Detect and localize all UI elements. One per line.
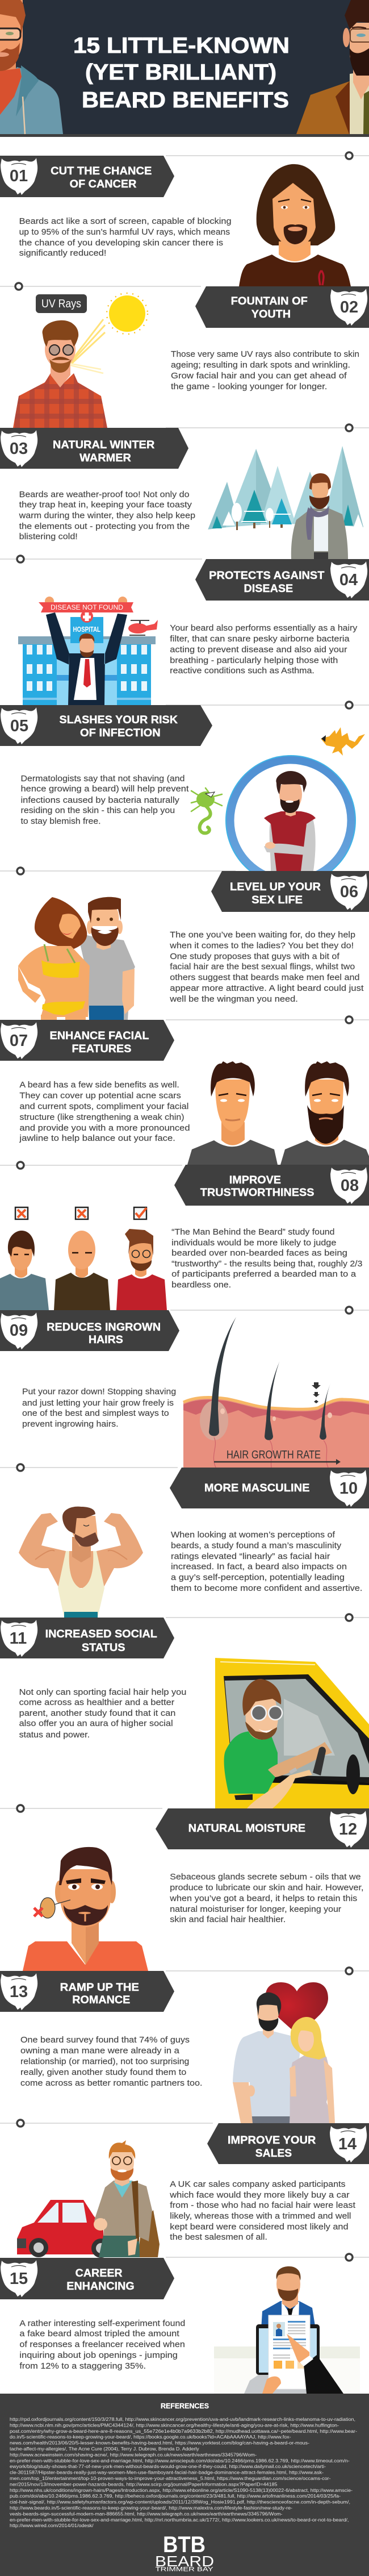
- text: benefit 03: warm during the winter, they also help keep: [19, 511, 195, 520]
- text: benefit 14: which face would they more likely buy a car: [169, 2190, 350, 2200]
- references list: do.in/5-scientific-reasons-to-keep-growing-your-beard/, https://books.google.co.uk/books?id=ACAbAAAAYAAJ, http://www.fox-: [10, 2434, 291, 2440]
- text: benefit 05: Dermatologists say that not shaving (and: [20, 774, 185, 783]
- references list: pub.com/doi/abs/10.2466/pms.1986.62.3.769, http://beheco.oxfordjournals.org/content/23/3/481.full, http://www.artofmanliness.com/2014/03/25/fa-: [10, 2493, 341, 2499]
- banner 04: protects against disease: PROTECTS AGAINST: [209, 569, 324, 582]
- text: benefit 08: “The Man Behind the Beard” study found: [171, 1227, 335, 1237]
- badge 04: [330, 561, 367, 598]
- icon: orange bacteria: [321, 727, 365, 756]
- text: benefit 01: Beards act like a sort of screen, capable of blocking: [19, 216, 232, 226]
- text: benefit 05: [20, 774, 189, 826]
- banner 12: natural moisture: NATURAL MOISTURE: [188, 1822, 305, 1835]
- badge 02: 02: [340, 298, 358, 316]
- text: benefit 07: [19, 1080, 190, 1143]
- text: benefit 10: increased. In fact, a beard also impacts on: [171, 1562, 347, 1572]
- badge 10: 10: [339, 1479, 358, 1498]
- header band: [0, 0, 369, 137]
- badge 02: [330, 289, 367, 326]
- badge 15: 15: [10, 2270, 28, 2288]
- text: benefit 09: [22, 1387, 176, 1429]
- text: benefit 10: beards, a study found a man’s masculinity: [171, 1541, 342, 1550]
- illustration: man with moustache and skin close-up: [23, 1847, 148, 1971]
- text: benefit 02: the game - looking younger for longer.: [171, 382, 327, 391]
- text: benefit 08: individuals would be more likely to judge: [171, 1238, 336, 1248]
- text: benefit 13: [20, 2035, 202, 2088]
- icon: cross checkbox 1: [15, 1207, 28, 1219]
- text: benefit 08: beardless one.: [171, 1280, 231, 1290]
- text: benefit 12: Sebaceous glands secrete sebum - oils that we: [170, 1872, 361, 1882]
- banner 07: enhance facial features: ENHANCE FACIAL: [50, 1029, 149, 1042]
- banner 08: improve trustworthiness: [174, 1165, 369, 1206]
- text: benefit 13: come across as better romantic partners too.: [20, 2078, 202, 2088]
- banner 10: more masculine: MORE MASCULINE: [204, 1482, 310, 1494]
- label: UV Rays: [36, 294, 87, 313]
- text: benefit 05: to stay blemish free.: [20, 816, 101, 826]
- banner: DISEASE NOT FOUND: [39, 597, 133, 612]
- text: benefit 08: [171, 1227, 362, 1290]
- illustration: ring and man with crossed arms: [226, 756, 355, 885]
- references list: http://www.ncbi.nlm.nih.gov/pmc/articles/PMC4344124/, http://www.skincancer.org/healthy-lifestyle/anti-aging/you-are-at-risk, http://www.huffington-: [10, 2422, 339, 2428]
- references list: en-prefer-men-with-stubble-for-love-sex-and-marriage.html, http://www.amsciepub.com/doi/abs/10.2466/pms.1986.62.3.769, http://www.timeout.com/n-: [10, 2458, 350, 2464]
- text: benefit 08: of participants preferred a bearded man to a: [171, 1269, 357, 1279]
- text: benefit 10: When looking at women’s perceptions of: [171, 1530, 336, 1540]
- references list: ner/2015/nov/13/movember-power-hazards-beards, http://www.scirp.org/journal/PaperInformation.aspx?PaperID=44185: [10, 2481, 278, 2487]
- text: benefit 15: from 12% to a staggering 35%.: [19, 2361, 146, 2371]
- text: benefit 08: “trustworthy” - the results being that, roughly 2/3: [171, 1259, 362, 1269]
- banner 03: natural winter warmer: NATURAL WINTER: [53, 439, 154, 451]
- banner 06: level up your sex life: LEVEL UP YOUR: [230, 881, 321, 893]
- references list: http://www.wired.com/2014/01/odesk/: [10, 2523, 94, 2528]
- badge 09: 09: [10, 1322, 28, 1340]
- text: benefit 06: The one you’ve been waiting for, do they help: [170, 930, 355, 940]
- illustration: muscle man: [19, 1507, 143, 1618]
- text: benefit 15: a fake beard almost tripled the amount: [19, 2329, 180, 2339]
- text: benefit 04: [170, 623, 358, 676]
- banner 14: improve your sales: IMPROVE YOUR: [228, 2134, 316, 2146]
- title: 15 LITTLE-KNOWN: [73, 34, 290, 58]
- banner 01: cut the chance of cancer: OF CANCER: [70, 178, 136, 190]
- badge 12: 12: [339, 1820, 357, 1839]
- banner 05: slashes your risk of infection: OF INFECTION: [80, 727, 161, 739]
- references list: http://www.nhs.uk/conditions/ingrown-hairs/Pages/Introduction.aspx, http://www.ehbonline.org/article/S1090-5138(13)00022-6/abstract, http://www.amscie-: [10, 2487, 353, 2493]
- references list: cial-hair-signal/, http://www.safetyhumanfactors.org/wp-content/uploads/2011/12/38Wog_Hosie1991.pdf, http://thescienceofacne.com/in-depth-sebum/,: [10, 2499, 350, 2505]
- banner 14: improve your sales: [207, 2123, 369, 2164]
- title: (YET BRILLIANT): [85, 60, 276, 85]
- references list: [10, 2416, 357, 2528]
- illustration: couple: [18, 897, 135, 1020]
- banner 11: increased social status: [0, 1618, 174, 1658]
- banner 02: fountain of youth: YOUTH: [251, 308, 291, 320]
- text: benefit 02: ageing; resulting in dark spots and wrinkling.: [171, 360, 350, 370]
- badge 08: [330, 1167, 367, 1204]
- badge 06: [330, 873, 367, 910]
- badge 01: 01: [10, 167, 28, 185]
- text: benefit 15: [19, 2319, 185, 2371]
- badge 06: 06: [340, 883, 358, 901]
- text: benefit 04: breathing - particularly helping those with: [170, 656, 338, 665]
- references list: http://www.acneeinstein.com/shaving-acne/, http://www.telegraph.co.uk/news/earth/earthnews/3345796/Wom-: [10, 2452, 257, 2457]
- banner 07: enhance facial features: [0, 1020, 174, 1061]
- text: benefit 13: owning a man mane were already in a: [20, 2046, 180, 2056]
- text: benefit 05: hence growing a beard) will help prevent: [20, 784, 189, 794]
- badge 14: 14: [338, 2135, 357, 2153]
- text: benefit 11: Not only can sporting facial hair help you: [19, 1687, 186, 1697]
- icon: cross checkbox 2: [76, 1207, 88, 1219]
- banner 13: ramp up the romance: ROMANCE: [72, 1994, 130, 2006]
- badge 13: [1, 1973, 37, 2010]
- banner 02: fountain of youth: FOUNTAIN OF: [231, 295, 308, 307]
- icon: green bacteria: [191, 788, 222, 833]
- text: benefit 13: relationship (or married), not too surprising: [20, 2057, 189, 2066]
- banner 04: protects against disease: [195, 559, 369, 601]
- references list: en-prefer-men-with-stubble-for-love-sex-and-marriage.html, http://nrl.northumbria.ac.uk/1772/, http://www.lookers.co.uk/news/to-beard-or-not-to-beard/,: [10, 2517, 349, 2523]
- text: benefit 07: A beard has a few side benefits as well.: [19, 1080, 179, 1090]
- text: benefit 11: come across as healthier and a better: [19, 1698, 174, 1707]
- text: benefit 06: well be the wingman you need.: [169, 994, 298, 1004]
- badge 03: 03: [10, 440, 28, 458]
- text: benefit 14: likely, whereas those with a trimmed and well: [170, 2211, 351, 2221]
- text: benefit 01: the chance of you developing skin cancer there is: [19, 238, 223, 248]
- badge 05: [1, 707, 37, 744]
- text: benefit 14: the best salesmen of all.: [170, 2232, 267, 2242]
- text: benefit 15: A rather interesting self-experiment found: [19, 2319, 185, 2328]
- illustration: couple with heart: [233, 1982, 335, 2123]
- references list: tache-affect-my-allergies/, The Acne Cure (2004), Terry J. Dubrow, Brenda D. Adderly: [10, 2446, 199, 2452]
- text: benefit 04: reactive conditions such as Asthma.: [170, 666, 315, 676]
- references list: veals-beards-sign-successful-modern-man-886655.html, http://www.telegraph.co.uk/news/earth/earthnews/3345796/Wom-: [10, 2511, 283, 2516]
- text: benefit 14: from - those who had no facial hair were least: [170, 2200, 356, 2210]
- text: benefit 06: when it comes to the ladies? You bet they do!: [169, 941, 354, 951]
- text: benefit 04: acting to prevent disease and also aid your: [170, 645, 347, 655]
- illustration: clean-shaven and bearded men: [187, 1061, 369, 1165]
- text: benefit 15: inquiring about job openings - jumping: [19, 2350, 178, 2360]
- text: benefit 11: also offer you an aura of higher social: [19, 1719, 173, 1728]
- text: benefit 04: Your beard also performs essentially as a hairy: [170, 623, 358, 633]
- banner 11: increased social status: STATUS: [82, 1641, 125, 1654]
- banner 15: career enhancing: [0, 2258, 174, 2299]
- text: benefit 03: [19, 490, 195, 541]
- banner 08: improve trustworthiness: IMPROVE: [229, 1174, 281, 1186]
- text: benefit 03: Beards are weather-proof too! Not only do: [19, 490, 190, 499]
- logo: Beard Trimmer Bay: TRIMMER BAY: [156, 2566, 213, 2573]
- badge 01: [1, 158, 37, 195]
- text: benefit 09: one of the best and simplest ways to: [22, 1408, 169, 1418]
- banner 04: protects against disease: DISEASE: [244, 582, 293, 595]
- text: benefit 14: A UK car sales company asked participants: [170, 2179, 346, 2189]
- text: benefit 06: [169, 930, 364, 1004]
- banner 11: increased social status: INCREASED SOCIAL: [45, 1628, 157, 1640]
- label: hair growth rate arrow: HAIR GROWTH RATE: [227, 1449, 321, 1461]
- text: benefit 13: really, given another study found them to: [20, 2068, 186, 2077]
- text: benefit 05: infections caused by bacteria naturally: [20, 795, 179, 805]
- text: benefit 02: [171, 349, 359, 391]
- banner 07: enhance facial features: FEATURES: [72, 1043, 131, 1055]
- text: benefit 11: parent, another study found that it can: [19, 1708, 175, 1718]
- illustration: red-haired man in hoodie: [0, 0, 63, 134]
- banner 14: improve your sales: SALES: [255, 2147, 292, 2160]
- illustration: winter mountains and man in scarf: [207, 446, 364, 559]
- text: benefit 06: One study proposes that guys with a bit of: [170, 952, 340, 961]
- icon: tick checkbox: [134, 1207, 146, 1219]
- references list: news.com/health/2013/06/20/5-lesser-known-benefits-having-beard.html, https://www.yorktest.com/blog/can-having-a-beard-or-mous-: [10, 2440, 309, 2446]
- badge 12: [330, 1811, 367, 1848]
- references list: http://rpd.oxfordjournals.org/content/150/3/278.full, http://www.skincancer.org/prevention/uva-and-uvb/landmark-research-links-melanoma-to-uv-radiation,: [10, 2416, 355, 2422]
- banner 09: reduces ingrown hairs: HAIRS: [89, 1333, 123, 1346]
- text: benefit 10: [171, 1530, 362, 1593]
- text: benefit 09: and just letting your hair grow freely is: [22, 1398, 174, 1408]
- illustration: car salesman and red car: [17, 2140, 160, 2258]
- badge 14: [330, 2125, 367, 2162]
- banner 09: reduces ingrown hairs: [0, 1310, 179, 1351]
- illustration: hospital with man holding banner: [18, 597, 158, 705]
- text: benefit 03: blistering cold!: [19, 532, 78, 541]
- banner: DISEASE NOT FOUND: DISEASE NOT FOUND: [51, 605, 123, 611]
- text: benefit 12: natural moisturiser for longer, keeping your: [170, 1904, 341, 1914]
- text: benefit 01: significantly reduced!: [19, 248, 106, 258]
- text: benefit 11: status and power.: [19, 1730, 90, 1740]
- banner 02: fountain of youth: [195, 286, 369, 328]
- logo: Beard Trimmer Bay: BEARD: [155, 2553, 214, 2570]
- banner 01: cut the chance of cancer: [0, 156, 174, 197]
- title: BEARD BENEFITS: [82, 88, 289, 112]
- banner 09: reduces ingrown hairs: REDUCES INGROWN: [47, 1321, 161, 1333]
- text: benefit 10: them to become more confident and assertive.: [171, 1583, 362, 1593]
- banner 06: level up your sex life: SEX LIFE: [251, 894, 303, 906]
- text: benefit 09: prevent ingrowing hairs.: [22, 1419, 119, 1429]
- text: benefit 01: [19, 216, 232, 258]
- banner 15: career enhancing: ENHANCING: [66, 2280, 135, 2292]
- text: benefit 07: They can cover up potential acne scars: [19, 1091, 181, 1101]
- banner 06: level up your sex life: [211, 871, 369, 912]
- badge 04: 04: [339, 571, 358, 589]
- text: benefit 07: and current spots, compliment your facial: [19, 1102, 188, 1111]
- banner 08: improve trustworthiness: TRUSTWORTHINESS: [200, 1186, 315, 1199]
- banner 15: career enhancing: CAREER: [76, 2267, 123, 2279]
- banner 05: slashes your risk of infection: SLASHES YOUR RISK: [59, 714, 178, 726]
- text: benefit 04: filter, that can snare pesky airborne bacteria: [170, 634, 350, 644]
- text: benefit 06: facial hair are the best sexual flings, whilst two: [170, 962, 355, 972]
- badge 09: [1, 1312, 37, 1349]
- text: benefit 07: jawline to help balance out your face.: [19, 1133, 175, 1143]
- text: benefit 07: and provide you with a more pronounced: [19, 1123, 190, 1133]
- text: benefit 03: the elements out - protecting you from the: [19, 522, 190, 531]
- text: benefit 14: kept beard were considered most likely and: [170, 2222, 349, 2232]
- badge 11: [1, 1620, 37, 1657]
- badge 15: [1, 2260, 37, 2297]
- text: benefit 07: structure (like strengthening a weak chin): [19, 1112, 184, 1122]
- banner 03: natural winter warmer: [0, 428, 188, 469]
- banner 10: more masculine: [170, 1468, 369, 1508]
- icon: skin close-up with cross: [34, 1898, 70, 1918]
- footer panel: [0, 2394, 369, 2576]
- references list: men.com/top_10/entertainment/top-10-proven-ways-to-improve-your-attractiveness_5.html, https://www.theguardian.com/science/occams-cor-: [10, 2475, 331, 2481]
- badge 11: 11: [10, 1629, 27, 1648]
- text: benefit 06: appear more attractive. A light beard could just: [170, 983, 364, 993]
- references list: cle-3011587/Hipster-beards-really-just-way-women-Men-use-flamboyant-facial-hair-badge-dominance-attract-females.html, http://www.ask-: [10, 2470, 324, 2475]
- text: benefit 12: produce to lubricate our skin and hair. However,: [170, 1883, 363, 1893]
- text: benefit 14: [169, 2179, 356, 2242]
- heading: references: REFERENCES: [161, 2402, 209, 2410]
- references list: post.com/entry/why-grow-a-beard-here-are-8-reasons_us_55e726e1e4b0b7a9633b2b82, http://mudhead.uottawa.ca/~pete/beard.html, http://www.bear-: [10, 2428, 357, 2434]
- text: benefit 15: of responses a freelancer received when: [19, 2340, 185, 2349]
- badge 08: 08: [341, 1177, 359, 1195]
- text: benefit 08: bearded over non-bearded faces as being: [171, 1248, 347, 1258]
- title: [73, 34, 290, 112]
- logo: Beard Trimmer Bay: [155, 2532, 214, 2573]
- badge 10: [330, 1470, 367, 1507]
- references list: ewyork/blog/study-shows-that-77-of-new-york-men-without-beards-would-grow-one-if-they-could, http://www.dailymail.co.uk/sciencetech/arti-: [10, 2464, 326, 2469]
- badge 07: 07: [10, 1032, 28, 1050]
- logo: Beard Trimmer Bay: BTB: [163, 2532, 206, 2557]
- illustration: man driving yellow taxi: [215, 1658, 369, 1808]
- banner 05: slashes your risk of infection: [0, 705, 212, 746]
- badge 05: 05: [10, 717, 28, 735]
- icon: helicopter: [128, 620, 158, 636]
- text: benefit 01: up to 95% of the sun’s harmful UV rays, which means: [19, 227, 230, 237]
- banner 12: natural moisture: [156, 1808, 369, 1849]
- text: benefit 02: Those very same UV rays also contribute to skin: [171, 349, 359, 359]
- banner 13: ramp up the romance: RAMP UP THE: [60, 1981, 139, 1994]
- text: benefit 05: residing on the skin - this can help you: [20, 806, 175, 815]
- text: benefit 12: [169, 1872, 363, 1924]
- illustration: long-haired man with awareness ribbon: [239, 164, 351, 286]
- text: benefit 12: skin and facial hair healthier.: [170, 1915, 286, 1924]
- text: benefit 10: ratings elevated “linearly” as facial hair: [171, 1552, 330, 1561]
- badge 07: [1, 1022, 37, 1059]
- illustration: job applicant with CV and laptop: [214, 2266, 360, 2394]
- references list: http://www.beardo.in/5-scientific-reasons-to-keep-growing-your-beard/, http://www.malextra.com/lifestyle-fashion/new-study-re-: [10, 2505, 292, 2511]
- text: benefit 03: they trap heat in, keeping your face toasty: [19, 500, 192, 510]
- illustration: skin cross-section and hair growth: [183, 1317, 369, 1468]
- text: benefit 13: One beard survey found that 74% of guys: [20, 2035, 190, 2045]
- illustration: dark-haired man in brown jacket: [296, 0, 369, 134]
- text: benefit 10: a guy’s self-perception, potentially leading: [171, 1573, 345, 1582]
- illustration: UV rays and man: [13, 293, 148, 428]
- illustration: checkboxes and three men: [0, 1207, 167, 1310]
- badge 13: 13: [10, 1983, 28, 2001]
- text: benefit 12: when you’ve got a beard, it helps to retain this: [169, 1894, 357, 1903]
- label: UV Rays: UV Rays: [41, 298, 81, 310]
- badge 03: [1, 430, 37, 467]
- label: HOSPITAL: HOSPITAL: [73, 625, 100, 633]
- banner 01: cut the chance of cancer: CUT THE CHANCE: [51, 165, 152, 177]
- text: benefit 09: Put your razor down! Stopping shaving: [22, 1387, 176, 1397]
- banner 03: natural winter warmer: WARMER: [79, 452, 131, 464]
- text: benefit 06: others suggest that beards make men feel and: [170, 973, 360, 982]
- text: benefit 02: Grow facial hair and you can get ahead of: [171, 371, 347, 381]
- text: benefit 11: [19, 1687, 186, 1740]
- banner 13: ramp up the romance: [0, 1971, 174, 2012]
